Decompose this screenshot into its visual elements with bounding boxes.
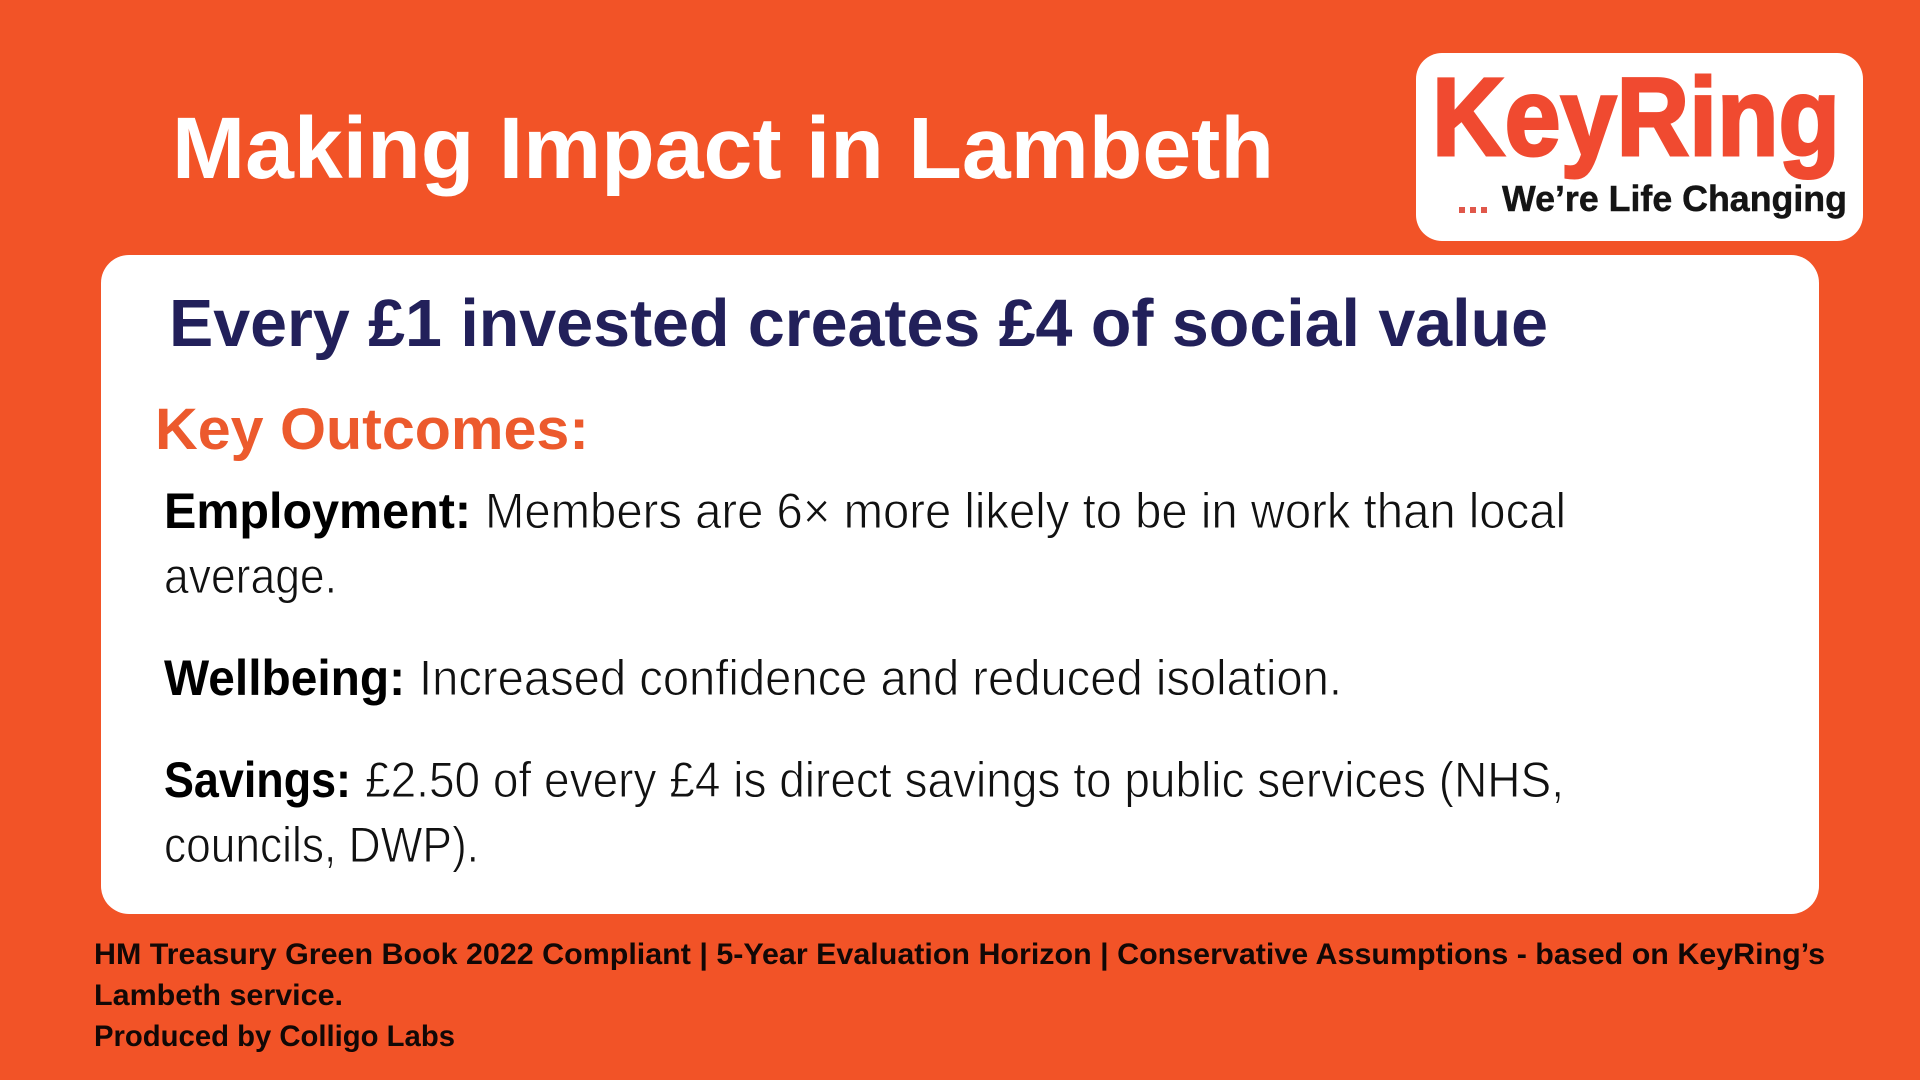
text: employment: average. bbox=[164, 548, 337, 604]
heading: key outcomes: Key Outcomes: bbox=[155, 397, 589, 462]
text: wellbeing: Increased confidence and reduced isolation. bbox=[419, 650, 1342, 706]
text: savings: £2.50 of every £4 is direct savings to public services (NHS, bbox=[365, 752, 1564, 808]
logo: KeyRing: KeyRing bbox=[1432, 56, 1840, 179]
text: employment: Employment: bbox=[164, 483, 471, 539]
title: Making Impact in Lambeth bbox=[172, 100, 1274, 197]
text: employment: Members are 6× more likely to be in work than local bbox=[485, 483, 1566, 539]
footer note: HM Treasury Green Book 2022 Compliant | 5-Year Evaluation Horizon | Conservative Assumptions - based on KeyRing’s bbox=[94, 938, 1825, 971]
footer note bbox=[94, 938, 1825, 1053]
logo: KeyRing bbox=[1416, 53, 1863, 241]
text: employment bbox=[164, 483, 1566, 604]
heading: social value: Every £1 invested creates £4 of social value bbox=[169, 286, 1548, 361]
logo: KeyRing: We’re Life Changing bbox=[1502, 178, 1847, 219]
footer note: Produced by Colligo Labs bbox=[94, 1020, 455, 1053]
text: savings bbox=[164, 752, 1564, 873]
text: wellbeing: Wellbeing: bbox=[164, 650, 405, 706]
panel: key outcomes bbox=[101, 255, 1819, 914]
text: savings: Savings: bbox=[164, 752, 351, 808]
text: savings: councils, DWP). bbox=[164, 817, 479, 873]
footer note: Lambeth service. bbox=[94, 979, 343, 1012]
